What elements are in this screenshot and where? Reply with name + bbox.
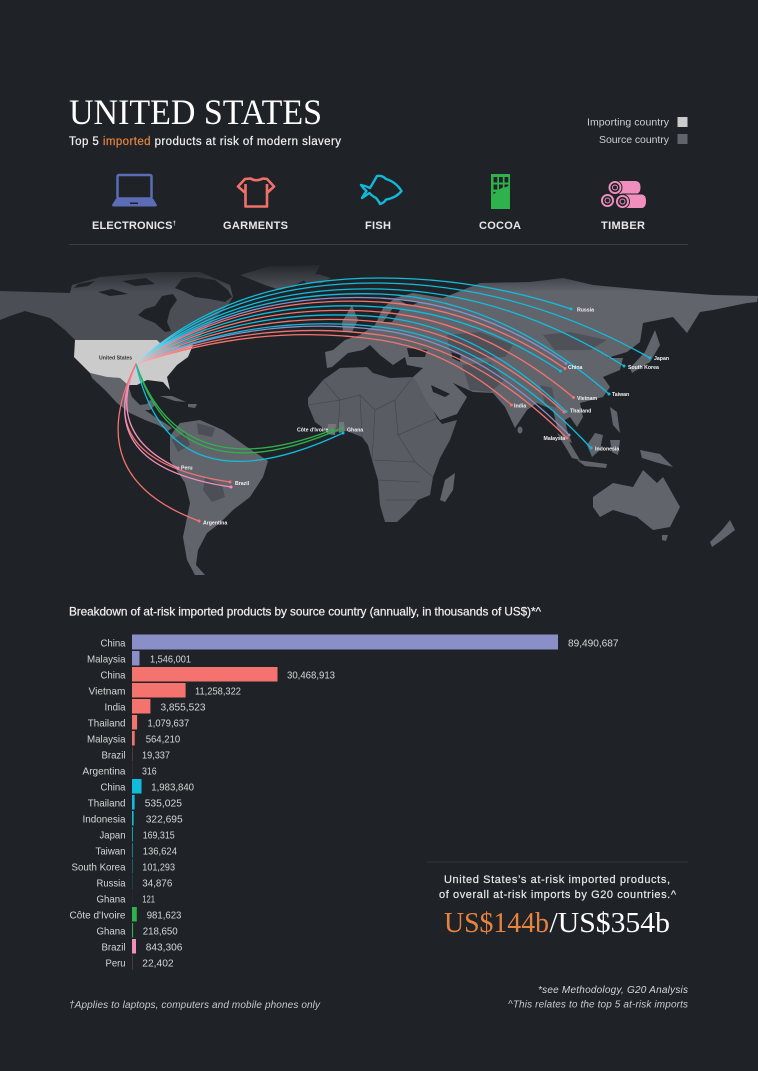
country labels: India: [104, 702, 126, 714]
values: 1,546,001: [150, 654, 191, 666]
arcs: northern routes: [136, 278, 650, 448]
values: 564,210: [146, 734, 180, 746]
values: 89,490,687: [568, 638, 619, 650]
values: 316: [142, 766, 157, 778]
callout: share of G20 imports: United States’s at-risk imported products,: [444, 874, 670, 886]
country labels on map: South Korea: [628, 365, 659, 371]
country labels: Brazil: [102, 750, 126, 762]
country labels on map: Taiwan: [612, 392, 629, 398]
values: 101,293: [142, 862, 175, 874]
values: 981,623: [147, 910, 182, 922]
country labels on map: Côte d'Ivoire: [297, 428, 328, 434]
land: South America: [170, 420, 268, 575]
category labels: GARMENTS: [223, 220, 288, 232]
land: Mexico and Central America: [90, 373, 197, 431]
country labels: Taiwan: [96, 846, 126, 858]
country labels on map: Peru: [181, 466, 193, 472]
icon: laptop: [112, 175, 157, 206]
land: top fade: [0, 262, 758, 292]
values: [142, 638, 619, 970]
country labels: Russia: [96, 878, 126, 890]
category labels: [92, 220, 645, 232]
land: United States importer: [74, 340, 193, 390]
country labels: Ghana: [96, 926, 126, 938]
callout: share of G20 imports: [427, 862, 688, 939]
legend: [587, 116, 688, 146]
callout: share of G20 imports: of overall at-risk imports by G20 countries.^: [439, 889, 677, 901]
title: UNITED STATES: [69, 92, 322, 132]
category labels: FISH: [365, 220, 391, 232]
values: 218,650: [143, 926, 178, 938]
legend: Importing country: [587, 116, 670, 128]
arcs: southern routes: [118, 364, 343, 521]
icon: t-shirt: [238, 178, 274, 206]
land: Eurasia: [325, 278, 758, 443]
footnotes: methodology: ^This relates to the top 5 at-risk imports: [508, 1000, 688, 1010]
country labels: Thailand: [88, 798, 126, 810]
country labels: Côte d'Ivoire: [70, 910, 126, 922]
values: 322,695: [146, 814, 183, 826]
bars: [132, 634, 558, 970]
country labels: China: [100, 670, 126, 682]
country labels: Japan: [100, 830, 126, 842]
country labels: Argentina: [82, 766, 126, 778]
country labels on map: [99, 308, 669, 526]
footnote: dagger: †Applies to laptops, computers and mobile phones only: [69, 1000, 321, 1011]
land: seas inside Eurasia: [383, 298, 462, 397]
country labels: Malaysia: [87, 654, 126, 666]
country labels on map: Argentina: [203, 520, 227, 526]
world map: [0, 262, 758, 575]
category labels: †: [173, 221, 176, 227]
subtitle: Top 5 imported products at risk of modern slavery: [69, 136, 341, 148]
category labels: COCOA: [479, 220, 521, 232]
country labels on map: Malaysia: [544, 436, 565, 442]
country labels on map: Ghana: [347, 428, 363, 434]
values: 169,315: [143, 830, 175, 842]
land: Greenland and Iceland: [240, 265, 331, 290]
country labels: Indonesia: [82, 814, 126, 826]
land: Africa: [308, 367, 457, 522]
land: Canada and Alaska: [0, 272, 233, 348]
values: 34,876: [142, 878, 172, 890]
values: 1,079,637: [148, 718, 189, 730]
chart heading: Breakdown of at-risk imported products by source country (annually, in thousands of US$)*^: [69, 604, 541, 618]
country labels on map: India: [514, 404, 526, 410]
country labels on map: Thailand: [570, 408, 591, 414]
values: 136,624: [143, 846, 177, 858]
values: 535,025: [145, 798, 182, 810]
country labels: Thailand: [88, 718, 126, 730]
country labels on map: Indonesia: [595, 446, 619, 452]
country labels on map: Vietnam: [577, 396, 597, 402]
country labels: South Korea: [72, 862, 126, 874]
values: 121: [142, 894, 155, 906]
footnotes: methodology: [508, 985, 688, 1010]
values: 30,468,913: [287, 670, 335, 682]
land: Japan, islands, Australasia: [557, 330, 735, 547]
values: 843,306: [146, 942, 183, 954]
country labels: Vietnam: [88, 686, 126, 698]
country labels on map: China: [568, 365, 583, 371]
values: 22,402: [142, 958, 174, 970]
country labels on map: United States: [99, 356, 132, 362]
icon: cocoa bar: [491, 174, 510, 209]
category labels: ELECTRONICS: [92, 220, 172, 232]
country labels: Malaysia: [87, 734, 126, 746]
country labels: Brazil: [102, 942, 126, 954]
country labels on map: Japan: [654, 356, 669, 362]
bar chart: [70, 634, 619, 970]
country labels: [70, 638, 126, 970]
country labels on map: Russia: [577, 308, 594, 314]
icon: timber logs: [600, 180, 646, 208]
country labels: Peru: [106, 958, 126, 970]
footnotes: methodology: *see Methodology, G20 Analysis: [538, 985, 688, 996]
country labels: China: [100, 638, 126, 650]
destination dots: [176, 308, 652, 522]
values: 11,258,322: [195, 686, 241, 698]
values: 19,337: [142, 750, 170, 762]
land: bays and channels: [74, 277, 232, 332]
land: UK: [342, 305, 358, 332]
land: darker interior countries: [447, 332, 607, 408]
icon: fish: [361, 176, 402, 204]
category labels: TIMBER: [601, 220, 645, 232]
callout: share of G20 imports: US$144b: [444, 907, 549, 939]
country labels: Ghana: [96, 894, 126, 906]
land: Ghana and Cote d'Ivoire highlight: [327, 422, 345, 435]
country labels: China: [100, 782, 126, 794]
callout: share of G20 imports: /US$354b: [550, 907, 670, 939]
values: 1,983,840: [151, 782, 194, 794]
values: 3,855,523: [160, 702, 206, 714]
legend: Source country: [599, 134, 670, 146]
country labels on map: Brazil: [235, 481, 250, 487]
